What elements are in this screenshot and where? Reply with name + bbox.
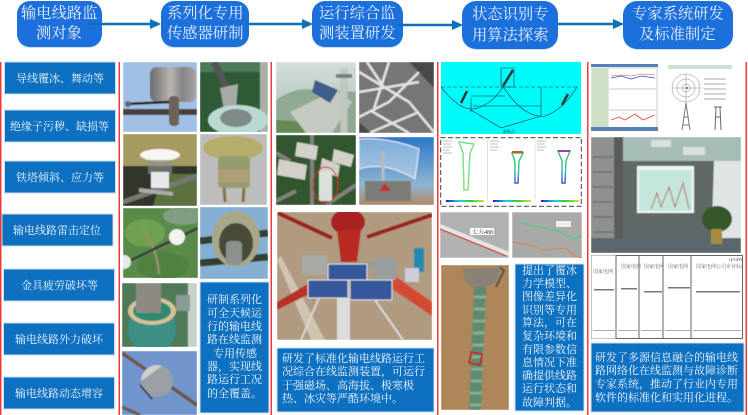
chart: tower inclination display [668,65,732,130]
item: fitting fatigue [4,269,114,301]
panel: algorithms [440,62,584,411]
text block: sensors summary: 的全覆盖。 [207,386,262,400]
photo: fitting sensor on insulator [200,62,268,132]
text block: expert system summary [591,343,744,412]
text block: monitoring device summary [277,348,434,412]
header: expert system and standards [623,1,733,50]
text block: algorithm summary: 运行状态和 [522,381,577,395]
text block: algorithm summary: 力学模型、 [522,276,577,290]
photo: cylindrical sensor under tower [200,207,268,279]
documents: grid standards [591,255,746,339]
text block: monitoring device summary: 热、冰灾等严酷环境中。 [282,391,403,405]
item: insulator pollution [4,110,116,142]
item: external damage: 输电线路外力破坏 [15,332,104,346]
photo: iced tower [359,62,434,133]
photo: weather station on tower [123,134,197,206]
panel: monitoring targets list [2,62,116,409]
header: sensor development: 传感器研制 [167,24,244,42]
text block: algorithm summary: 确提供线路 [522,368,577,382]
item: lightning location [2,214,113,246]
text block: expert system summary: 专家系统，推动了行业内专用 [595,376,738,390]
text block: expert system summary: 软件的标准化和实用化进程。 [595,390,738,404]
arrow: monitoring targets to sensors [88,19,161,29]
photo: solar panels on tower top [277,212,432,340]
documents: grid standards: 国家电网 [644,263,664,270]
header: recognition algorithms: 状态识别专 [472,6,548,23]
screenshot: monitoring software [591,64,658,131]
item: conductor icing: 导线覆冰、舞动等 [16,71,104,85]
header: recognition algorithms: 用算法探索 [472,26,548,44]
header: monitoring device development: 测装置研发 [319,25,396,42]
panel: monitoring devices [276,62,434,412]
header: recognition algorithms [462,1,558,50]
item: tower tilt: 铁塔倾斜、应力等 [16,170,104,184]
photo: solar powered device on tower [276,62,356,133]
chart: tower stress simulations [440,137,582,207]
text block: sensors summary [200,282,269,413]
text block: algorithm summary: 故障判据。 [522,395,577,409]
diagram: icing mechanics model: 最低点 [503,128,516,134]
text block: algorithm summary: 识别等专用 [522,302,577,316]
text block: monitoring device summary: 于强磁场、高海拔、 [282,378,381,392]
item: external damage [4,323,114,355]
text block: algorithm summary: 有限参数信 [522,342,577,356]
item: insulator pollution: 绝缘子污秽、缺损等 [10,119,109,133]
text block: sensors summary: 专用传感 [213,346,257,360]
text block: sensors summary: 可全天候运 [207,306,263,320]
photo: monitoring room with projector [591,137,741,253]
header: monitoring device development: 运行综合监 [319,5,396,22]
text block: sensors summary: 路在线监测 [207,332,262,346]
text block: expert system summary: 路网络化在线监测与故障诊断 [595,363,738,377]
header: expert system and standards: 及标准制定 [639,26,716,43]
text block: sensors summary: 路运行工况 [207,373,262,386]
text block: algorithm summary [515,263,584,411]
text block: monitoring device summary: 研发了标准化输电线路运行工 [282,351,425,365]
image: recognised conductor: 七五488 [472,228,493,236]
text block: sensors summary: 行的输电线 [207,319,262,333]
text block: algorithm summary: 息情况下准 [522,355,577,369]
documents: grid standards: 国家电网公司企业标准 [696,263,746,270]
process flow headers [17,1,733,50]
text block: monitoring device summary: 况综合在线监测装置，可运行 [282,364,425,378]
header: sensor development [161,1,249,48]
photo: ring sensor on insulator [122,283,197,347]
photo: grid antenna and cabinet [359,137,434,205]
panel: sensors [117,62,269,415]
text block: sensors summary: 研制系列化 [207,292,262,306]
header: sensor development: 系列化专用 [167,5,244,22]
text block: algorithm summary: 提出了覆冰 [522,263,577,277]
arrow: monitoring devices to algorithms [397,20,463,30]
photo: device boxes with red circle [276,135,356,205]
text block: algorithm summary: 图像差异化 [522,289,577,303]
item: dynamic capacity [4,377,114,409]
text block: sensors summary: 器，实现线 [207,359,262,373]
panel: expert system [591,64,746,412]
documents: grid standards: 国家电网 [593,268,613,275]
item: fitting fatigue: 金具疲劳破坏等 [21,278,98,292]
photo: spherical sensor over forest [123,208,198,278]
documents: grid standards: Q/GDW [729,257,745,262]
photo: cylinder sensor on conductor [123,62,197,132]
header: monitoring targets: 测对象 [36,25,82,42]
text block: monitoring device summary: 极寒极 [381,378,414,392]
header: monitoring targets: 输电线路监 [21,4,98,22]
header: monitoring device development [312,1,403,48]
diagram: icing mechanics model [441,62,581,134]
photo: spherical sensor on wire [122,351,197,415]
documents: grid standards: 国家电网 [668,263,688,270]
arrow: sensors to monitoring devices [249,19,313,29]
header: expert system and standards: 专家系统研发 [632,6,724,22]
header: monitoring targets [17,1,102,48]
item: conductor icing [4,62,116,94]
text block: algorithm summary: 算法，可在 [522,315,577,329]
photo: composite insulator with defect marker [441,265,509,410]
item: lightning location: 输电线路雷击定位 [13,223,101,237]
item: tower tilt [4,161,116,193]
arrow: algorithms to expert system [557,19,624,29]
documents: grid standards: 国家电网 [621,263,641,270]
image: recognised conductor [440,212,509,258]
item: dynamic capacity: 输电线路动态增容 [15,386,103,400]
photo: round sensor with legs [200,134,267,205]
text block: algorithm summary: 复杂环境和 [522,328,577,342]
text block: expert system summary: 研发了多源信息融合的输电线 [595,350,738,364]
image: recognised line edges [512,212,582,258]
